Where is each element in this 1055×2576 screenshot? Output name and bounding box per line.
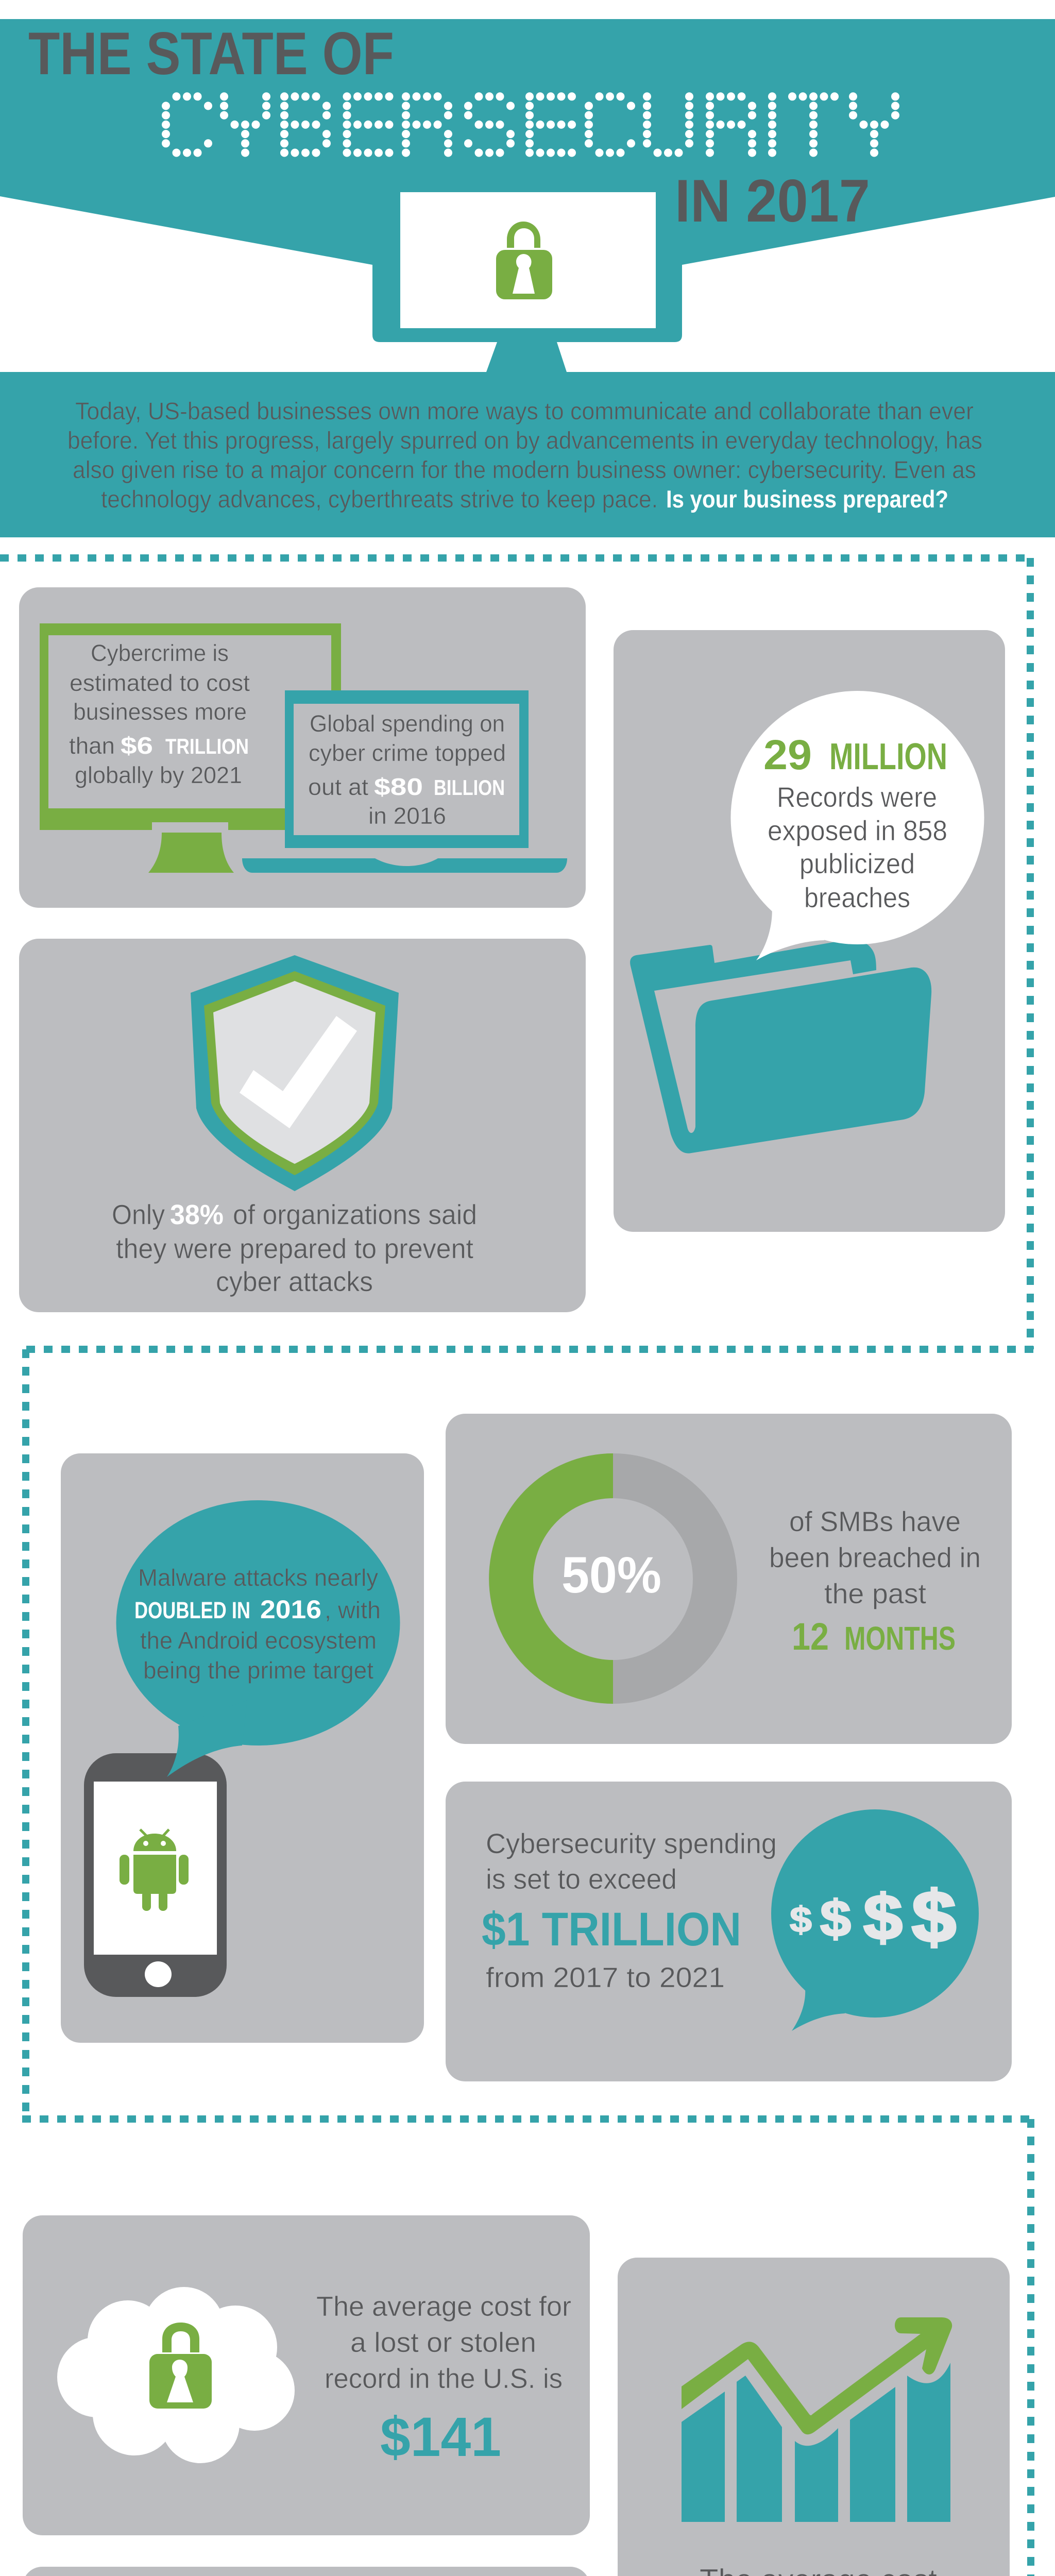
icon: shield with check [191,955,399,1191]
text: only 38%: cyber attacks [216,1266,373,1297]
bubble text: 2016 [260,1595,321,1624]
monitor text [69,640,250,788]
icon: padlock [496,222,552,299]
bubble text [134,1564,381,1684]
intro text: Today, US-based businesses own more ways to communicate and collaborate than ever [75,397,974,425]
panel: global spending [23,2567,590,2576]
monitor text: businesses more [73,699,247,725]
SMB text: been breached in [769,1541,981,1573]
monitor text: Cybercrime is [91,640,229,666]
monitor text: globally by 2021 [75,762,242,788]
speech bubble [730,691,984,960]
bubble text: Malware attacks nearly [138,1564,378,1591]
intro text: before. Yet this progress, largely spurred on by advancements in everyday technology, has [67,427,982,454]
icon: android robot [120,1829,189,1911]
laptop text: $80 [374,773,423,800]
icon: cloud with padlock [57,2287,295,2463]
record cost text: The average cost for [316,2291,571,2322]
panel: prepared organizations [19,939,586,1312]
speech bubble with dollar signs: $ [863,1882,903,1953]
speech bubble with dollar signs: $ [912,1876,956,1957]
text: only 38%: Only [112,1199,165,1230]
spending text: Cybersecurity spending [486,1827,777,1859]
icon: smartphone [84,1753,227,1997]
title [29,32,899,222]
spending text: $1 TRILLION [482,1903,741,1956]
bubble text [768,781,947,913]
donut chart [489,1453,737,1704]
monitor text: TRILLION [165,734,249,758]
panel: cybersecurity spending [446,1782,1012,2081]
spending text: is set to exceed [486,1863,677,1895]
bubble text: exposed in 858 [768,815,947,846]
intro band [0,372,1055,537]
stat: 29 million: MILLION [829,736,947,777]
intro text: technology advances, cyberthreats strive to keep pace. [101,485,658,513]
icon: laptop [242,690,567,873]
icon: folder [630,940,931,1154]
bars [682,2363,950,2522]
speech bubble with dollar signs [771,1809,979,2031]
laptop text: BILLION [434,775,505,800]
bubble text: Records were [777,781,937,813]
speech bubble [116,1500,400,1777]
header banner with monitor [0,19,1055,372]
SMB text [769,1505,981,1658]
laptop text [308,710,506,829]
record cost text: record in the U.S. is [325,2363,563,2394]
text: only 38% [112,1199,477,1297]
panel: cybercrime cost and spending [19,587,586,908]
monitor text: estimated to cost [70,670,250,696]
monitor text: than [69,733,115,759]
bubble text: the Android ecosystem [140,1627,377,1654]
laptop text: Global spending on [310,710,505,737]
title line: the state of: THE STATE OF [28,20,394,87]
record cost text [316,2291,571,2468]
spending text: from 2017 to 2021 [486,1961,725,1993]
chart: bars with trend arrow [682,2317,952,2522]
bubble text: , with [325,1597,381,1623]
SMB text: of SMBs have [789,1505,961,1537]
SMB text: the past [824,1578,926,1609]
bubble text: breaches [804,882,910,913]
SMB text: 12 [792,1615,829,1658]
bubble text: DOUBLED IN [134,1597,250,1623]
text: only 38%: they were prepared to prevent [116,1233,473,1264]
title line: in 2017: IN 2017 [675,167,870,234]
laptop text: out at [308,774,369,800]
speech bubble with dollar signs: $ [820,1890,851,1947]
SMB text: MONTHS [844,1620,956,1657]
monitor text: $6 [121,732,153,759]
laptop text: in 2016 [368,803,446,829]
stat: 29 million [763,732,947,778]
icon: trend arrow [682,2317,952,2434]
panel: cost per record [23,2215,590,2535]
record cost text: $141 [380,2405,501,2468]
intro text [67,397,982,513]
title line: cybersecurity dot matrix: CYBERSECURITY [159,77,903,185]
record cost text: a lost or stolen [350,2327,536,2358]
panel: cost per breach [618,2258,1010,2576]
monitor screen [400,192,656,328]
panel: SMB breaches [446,1414,1012,1744]
bubble text: publicized [799,848,915,879]
speech bubble with dollar signs: $ [790,1900,812,1940]
laptop text: cyber crime topped [309,740,506,766]
donut value: 50% [561,1546,661,1603]
panel: records exposed [614,630,1005,1232]
text: only 38%: 38% [170,1199,224,1230]
text: only 38%: of organizations said [233,1199,477,1230]
intro text: also given rise to a major concern for the modern business owner: cybersecurity. Even as [73,456,976,483]
icon: desktop monitor [40,623,341,873]
spending text [482,1827,777,1993]
stat: 29 million: 29 [763,732,812,778]
panel: malware [61,1453,424,2043]
intro text: Is your business prepared? [666,485,948,513]
bubble text: being the prime target [143,1657,373,1684]
